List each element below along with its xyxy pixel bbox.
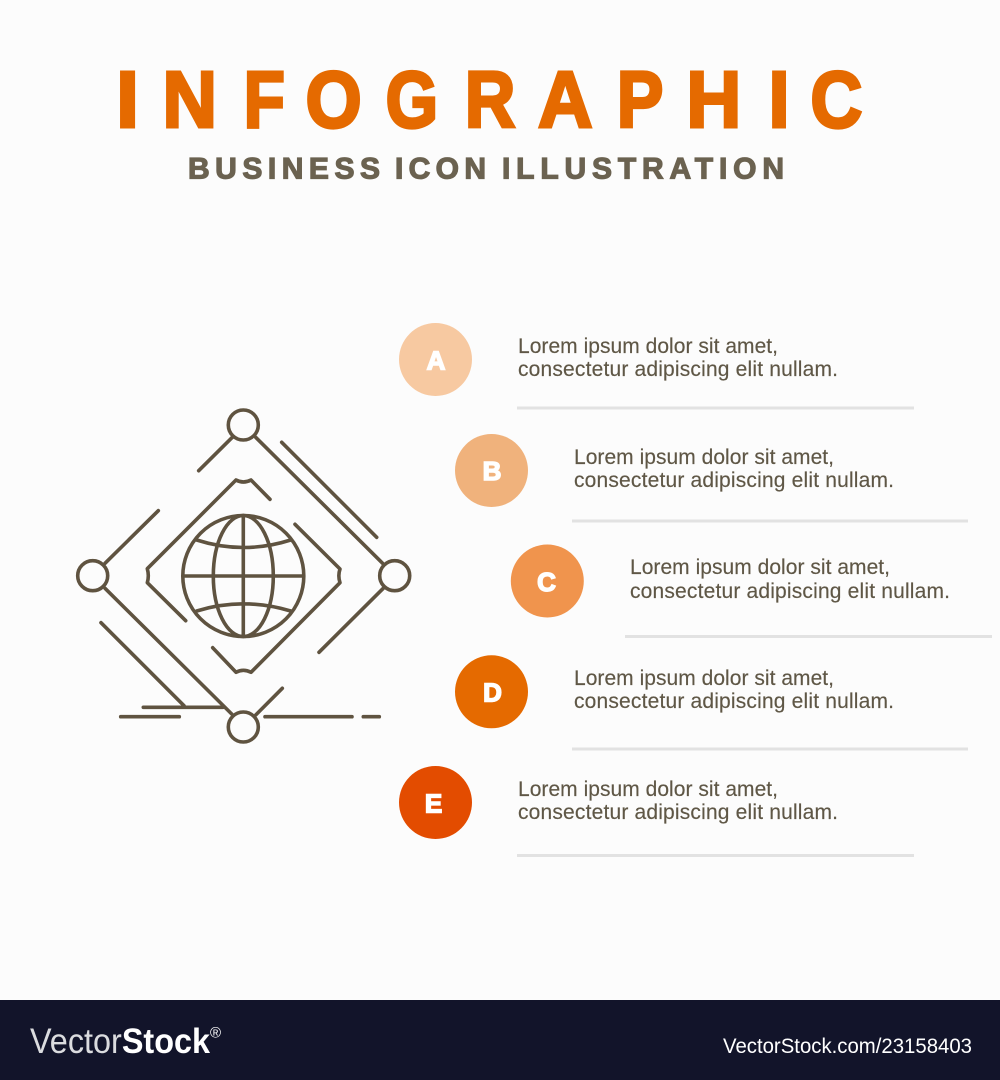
title: G [386,54,438,144]
icon: globe [183,516,304,636]
text B: Lorem ipsum dolor sit amet, [574,446,834,469]
text E [518,778,838,824]
circle C: C [537,567,556,597]
circle E: E [425,788,442,818]
title: O [306,56,362,145]
circle C [511,544,584,618]
circle A: A [427,346,446,376]
circle E [399,766,472,839]
text D: Lorem ipsum dolor sit amet, [574,667,834,690]
text E: Lorem ipsum dolor sit amet, [518,778,778,801]
circle B [455,434,528,507]
text A [518,335,838,381]
subtitle: BUSINESS [188,152,380,186]
title: N [162,56,217,144]
text D: consectetur adipiscing elit nullam. [574,690,894,713]
title: I [116,55,139,145]
title [116,54,862,145]
title: A [538,56,593,144]
text D [574,667,894,713]
title: P [617,54,663,144]
icon: inner diamond [147,480,340,672]
title: I [768,54,790,144]
title: C [810,55,862,145]
circle B: B [483,456,501,486]
circle D [455,655,528,728]
text C [630,556,950,603]
subtitle [188,152,784,186]
icon: node circles [78,410,410,742]
title: F [244,54,285,144]
footer image id: VectorStock.com/23158403 [723,1035,972,1058]
icon: globe network [78,410,410,742]
item A [399,323,914,408]
text B [574,446,894,492]
text A: consectetur adipiscing elit nullam. [518,358,838,381]
title: R [465,55,515,144]
subtitle: ILLUSTRATION [502,152,784,186]
item E [399,766,914,856]
text B: consectetur adipiscing elit nullam. [574,469,894,492]
text C: Lorem ipsum dolor sit amet, [630,556,890,579]
item B [455,434,968,521]
footer bar [0,1000,1000,1080]
subtitle: ICON [395,152,486,186]
text C: consectetur adipiscing elit nullam. [630,580,950,603]
item D [455,655,968,749]
footer logo: VectorStock [30,1022,210,1061]
text A: Lorem ipsum dolor sit amet, [518,335,778,358]
title: H [686,54,741,144]
circle D: D [483,678,502,708]
text E: consectetur adipiscing elit nullam. [518,801,838,824]
item C [511,544,992,636]
footer logo: ® [210,1024,221,1042]
icon: connector lines [101,437,383,717]
circle A [399,323,472,396]
